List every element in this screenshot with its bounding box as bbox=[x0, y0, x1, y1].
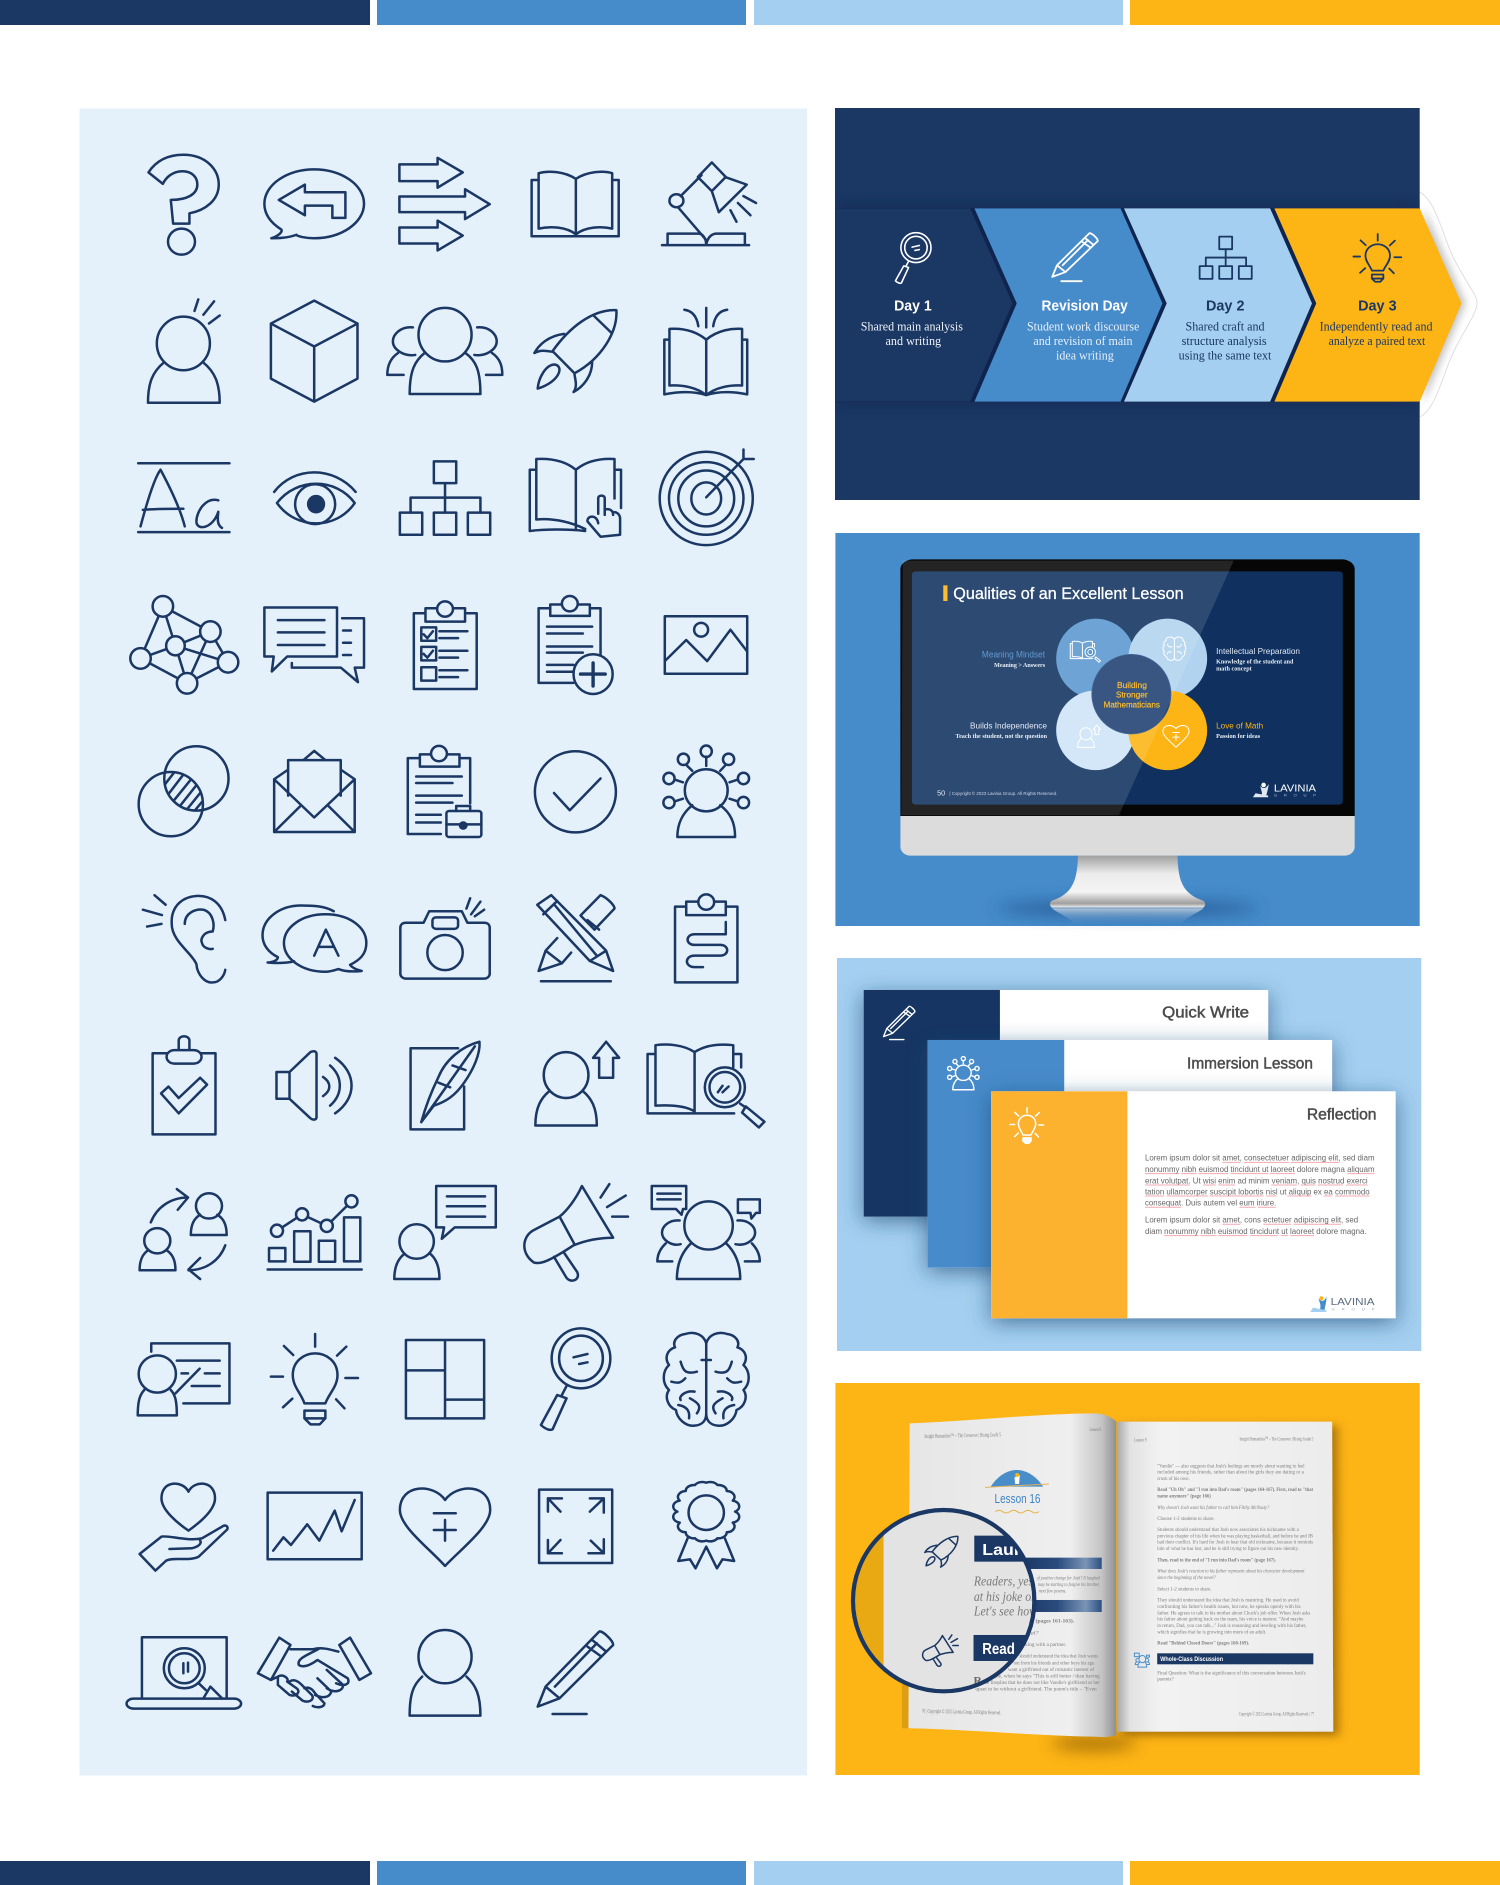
right workbook page: parents? bbox=[1157, 1677, 1174, 1682]
card: Reflection: Reflection bbox=[1307, 1106, 1376, 1123]
icon: megaphone in lens bbox=[923, 1635, 958, 1666]
card: Immersion Lesson: Immersion Lesson bbox=[1187, 1056, 1313, 1072]
left workbook page bbox=[908, 1413, 1116, 1737]
icon: person with idea rays bbox=[148, 299, 220, 403]
monitor stand bbox=[998, 856, 1258, 926]
left workbook page: want a girlfriend out of romantic interest of bbox=[1008, 1666, 1095, 1673]
icon: layout grid bbox=[406, 1340, 484, 1418]
Lavinia logo: LAVINIA bbox=[1274, 783, 1317, 794]
left workbook page: Insight Humanities™ – The Crossover | Rising Grade 5 bbox=[924, 1433, 1001, 1440]
icon: letters Aa bbox=[138, 463, 229, 532]
chevron: Day 3: analyze a paired text bbox=[1329, 335, 1425, 348]
Whole-Class Discussion bar: Whole-Class Discussion bbox=[1160, 1655, 1223, 1663]
lesson dome emblem bbox=[985, 1470, 1049, 1487]
slide labels: Meaning Mindset bbox=[982, 650, 1045, 660]
icon: group discussion bbox=[652, 1186, 760, 1279]
right workbook page: They should understand the idea that Josh is maturing. He used to avoid bbox=[1157, 1598, 1299, 1604]
bottom colour bars bbox=[0, 1861, 1500, 1885]
icon: camera bbox=[400, 898, 490, 979]
right workbook page: father. He agrees to talk to his mother about Chuck's job offer. When Josh asks bbox=[1157, 1610, 1311, 1616]
Read heading: Read bbox=[982, 1641, 1015, 1658]
ghost outline to the right of the panel bbox=[1420, 192, 1477, 417]
icon: growth chart bbox=[268, 1195, 362, 1269]
chevron: Day 1 bbox=[835, 208, 1012, 402]
slide title: Qualities of an Excellent Lesson bbox=[953, 584, 1184, 603]
monitor bezel bbox=[900, 559, 1355, 816]
card: Quick Write bbox=[864, 990, 1268, 1217]
right workbook page: Why doesn't Josh want his father to call him Filthy McNasty? bbox=[1157, 1504, 1269, 1511]
right workbook page: previous chapter of his life when he was playing basketball, and before he and JB bbox=[1157, 1533, 1313, 1539]
left workbook page: 76 | Copyright © 2023 Lavinia Group. All Rights Reserved. bbox=[922, 1708, 1001, 1716]
left workbook page: should understand the idea that Josh wants bbox=[1019, 1654, 1098, 1659]
left workbook page: the fireplies that he does not like Vandie's girlfriend or her bbox=[983, 1679, 1100, 1686]
right workbook page: Final Question: What is the significance of this conversation between Josh's bbox=[1157, 1670, 1306, 1676]
magnified italic copy: Let's see how bbox=[973, 1604, 1037, 1619]
section bars bbox=[1021, 1558, 1102, 1612]
Lavinia logo: LAVINIA bbox=[1331, 1297, 1375, 1308]
panel: icon library bbox=[80, 108, 807, 1776]
right workbook page: Read "Uh Oh" and "I run into Dad's room" (pages 164-167). First, read to "that bbox=[1157, 1486, 1313, 1493]
chevron: Day 3 bbox=[1274, 208, 1462, 402]
icon: clipboard with briefcase bbox=[408, 746, 481, 837]
icon: rocket in lens bbox=[925, 1536, 958, 1567]
left workbook page: upset to be without a girlfriend. The poem's title – "Even bbox=[975, 1686, 1097, 1692]
slide labels bbox=[956, 647, 1300, 740]
right workbook page: had their conflict. It's hard for Josh to hear that old nickname, because it reminds bbox=[1157, 1539, 1313, 1546]
slide footer: 50 bbox=[937, 789, 945, 797]
icon: magnifier on Day 1 bbox=[895, 233, 931, 283]
icon: brain bbox=[664, 1333, 749, 1426]
icon: bulb on yellow card bbox=[1010, 1108, 1044, 1143]
icon: book with pointing hand bbox=[530, 459, 621, 537]
screen glare bbox=[901, 561, 1234, 815]
chevron: Revision Day: idea writing bbox=[1056, 349, 1114, 363]
left workbook page: king with a partner. bbox=[1025, 1642, 1067, 1648]
right workbook page: Read "Behind Closed Doors" (pages 168-169). bbox=[1157, 1640, 1249, 1646]
icon: desk lamp over book bbox=[662, 162, 756, 245]
right workbook page: him of what he has lost, and he is still trying to figure out his new identity. bbox=[1157, 1545, 1299, 1552]
slide labels: Passion for ideas bbox=[1216, 733, 1261, 740]
chevron: Day 1: Day 1 bbox=[894, 298, 932, 314]
icons rows 5 to 8 bbox=[139, 746, 764, 1281]
left workbook page: Lesson 9 bbox=[1089, 1427, 1101, 1433]
lorem ipsum body copy: tation ullamcorper suscipit lobortis nisl ut aliquip ex ea commodo bbox=[1145, 1187, 1370, 1196]
panel: open workbook bbox=[835, 1383, 1420, 1775]
icon: group on right page bbox=[1134, 1653, 1149, 1667]
icon: person bbox=[410, 1630, 480, 1716]
icon: checklist clipboard bbox=[414, 601, 477, 689]
right workbook page: Students should understand that Josh now associates his nickname with a bbox=[1157, 1527, 1299, 1533]
card: Reflection bbox=[991, 1091, 1396, 1318]
Lavinia logo bbox=[1253, 783, 1317, 798]
left workbook page: next few poems. bbox=[1039, 1588, 1067, 1595]
chevron: Day 3: Day 3 bbox=[1358, 298, 1397, 314]
lorem ipsum body copy: consequat. Duis autem vel eum iriure. bbox=[1145, 1198, 1276, 1207]
left workbook page: may be starting to forgive his brother, bbox=[1038, 1581, 1100, 1588]
right workbook page: "Vandie" — also suggests that Josh's feelings are mostly about wanting to feel bbox=[1157, 1463, 1305, 1469]
icon: magnifying glass bbox=[541, 1328, 610, 1430]
icon: presenter at board bbox=[138, 1343, 229, 1415]
icon: eye bbox=[274, 472, 356, 524]
right workbook page: in return, Dad, you can talk..." Josh is reasoning and leveling with his father, bbox=[1157, 1622, 1307, 1629]
chevron: Day 2 bbox=[1124, 208, 1312, 402]
magnified italic copy bbox=[974, 1576, 1032, 1616]
left workbook page: ial? bbox=[1029, 1631, 1039, 1636]
icon: rocket bbox=[534, 310, 616, 392]
left workbook page: da" (pages 161-163). bbox=[1025, 1618, 1075, 1625]
icon: hierarchy on Day 2 bbox=[1200, 237, 1252, 279]
magnified italic copy: at his joke on bbox=[974, 1590, 1037, 1605]
icon: pencil bbox=[538, 1631, 613, 1714]
icon: award rosette bbox=[673, 1482, 739, 1568]
icon: hand holding heart bbox=[140, 1484, 228, 1571]
icon: pencil on Revision Day bbox=[1052, 233, 1098, 281]
icon: hierarchy chart bbox=[400, 461, 490, 535]
book shadows bbox=[902, 1680, 1136, 1752]
right workbook page: crush of his own. bbox=[1157, 1475, 1190, 1482]
right workbook page: Then, read to the end of "I run into Dad's room" (page 167). bbox=[1157, 1557, 1276, 1563]
lorem ipsum body copy: Lorem ipsum dolor sit amet, cons ectetuer adipiscing elit, sed bbox=[1145, 1215, 1358, 1224]
chevron: Day 3: Independently read and bbox=[1320, 320, 1433, 334]
icon: bulb on Day 3 bbox=[1353, 234, 1401, 282]
lesson 16 heading bbox=[995, 1492, 1040, 1513]
Read heading bbox=[974, 1634, 1026, 1661]
icon: clipboard with path bbox=[675, 894, 737, 982]
icon: person with arrow in pale circle bbox=[1078, 725, 1100, 747]
right workbook page: which signifies that he is growing into more of an adult. bbox=[1157, 1629, 1267, 1635]
icon: handshake bbox=[258, 1638, 371, 1707]
right workbook page: confronting his father's health issues, but now, he speaks openly with his bbox=[1157, 1603, 1301, 1610]
icon: question mark bbox=[148, 155, 219, 255]
icon: cube bbox=[271, 301, 357, 402]
lorem ipsum body copy: erat volutpat. Ut wisi enim ad minim veniam, quis nostrud exerci bbox=[1145, 1176, 1368, 1185]
icon: book and magnifier in blue circle bbox=[1070, 641, 1100, 662]
venn circles: Mathematicians bbox=[1104, 700, 1160, 709]
icon: heart in yellow circle bbox=[1163, 725, 1189, 747]
slide screen bbox=[912, 571, 1343, 805]
lorem ipsum body copy bbox=[1145, 1153, 1375, 1236]
icon: megaphone bbox=[524, 1184, 628, 1281]
chevron: Revision Day: and revision of main bbox=[1033, 335, 1133, 348]
chevron: Day 1: Shared main analysis bbox=[861, 320, 963, 334]
icon: light bulb bbox=[271, 1334, 358, 1424]
chevron: Revision Day: Revision Day bbox=[1042, 298, 1128, 314]
icon: crossed pencil and pen bbox=[537, 895, 615, 981]
Whole-Class Discussion bar bbox=[1157, 1653, 1313, 1664]
icon: open envelope bbox=[274, 751, 355, 832]
venn circles bbox=[1056, 619, 1207, 770]
left workbook page: mple, when he says "This is still better / than having bbox=[991, 1674, 1100, 1679]
icon: speaker bbox=[276, 1051, 352, 1120]
chevron: Revision Day: Student work discourse bbox=[1027, 320, 1139, 334]
icon: speech bubbles with letter bbox=[263, 906, 366, 972]
icon: check in circle bbox=[535, 751, 616, 832]
panel: lesson sequence chevrons bbox=[835, 108, 1477, 500]
icon: expand arrows bbox=[539, 1490, 612, 1563]
slide labels: Teach the student, not the question bbox=[956, 733, 1047, 740]
chevron: Day 1: and writing bbox=[886, 335, 941, 348]
right workbook page: Lesson 9 bbox=[1134, 1438, 1146, 1444]
monitor chin bbox=[900, 816, 1355, 856]
chevron: Day 2: Shared craft and bbox=[1186, 320, 1265, 334]
slide labels: Builds Independence bbox=[970, 721, 1047, 731]
icon: network bbox=[130, 596, 238, 694]
magnifying lens: R bbox=[974, 1676, 982, 1687]
icon: line graph bbox=[268, 1493, 362, 1559]
Launch heading bbox=[974, 1536, 1024, 1562]
lorem ipsum body copy: diam nonummy nibh euismod tincidunt ut laoreet dolore magna. bbox=[1145, 1227, 1367, 1236]
spell-check underlines bbox=[1145, 1162, 1375, 1236]
Lavinia logo: GROUP bbox=[1331, 1307, 1375, 1311]
lorem ipsum body copy: nonummy nibh euismod tincidunt ut laoreet dolore magna aliquam bbox=[1145, 1165, 1375, 1174]
right workbook page: Choose 1-2 students to share. bbox=[1157, 1516, 1215, 1522]
icon: clipboard with plus bbox=[539, 596, 613, 694]
slide labels: Meaning > Answers bbox=[994, 662, 1046, 669]
icon: person with ideas on blue card bbox=[948, 1057, 979, 1090]
icon: ear bbox=[143, 895, 225, 982]
icon: laptop with magnifier bbox=[127, 1637, 241, 1709]
right workbook page: his father about getting back on the team, his voice is mature: "And maybe bbox=[1157, 1616, 1304, 1623]
magnified italic copy: Readers, yes bbox=[973, 1575, 1033, 1589]
lesson 16 heading: Lesson 16 bbox=[995, 1492, 1040, 1506]
icon: book with magnifier bbox=[648, 1045, 764, 1127]
icon: speech bubble with return arrow bbox=[264, 169, 364, 238]
Lavinia logo: GROUP bbox=[1274, 793, 1316, 798]
right workbook page: since the beginning of the novel? bbox=[1157, 1574, 1216, 1581]
left workbook page: of positive change for Josh? It laughed bbox=[1037, 1575, 1100, 1581]
icon: person with up arrow bbox=[535, 1042, 619, 1126]
chevron: Day 2: using the same text bbox=[1179, 349, 1271, 363]
icons rows 9 to 11 bbox=[127, 1328, 749, 1716]
card: Quick Write: Quick Write bbox=[1162, 1005, 1249, 1021]
chevron: Day 2: Day 2 bbox=[1206, 298, 1244, 314]
icon: brain in light circle bbox=[1163, 637, 1186, 660]
slide footer bbox=[937, 789, 1057, 797]
venn circles: Building bbox=[1117, 681, 1147, 690]
icon: venn diagram bbox=[139, 746, 229, 836]
right workbook page: name anymore" (page 166) bbox=[1157, 1493, 1211, 1499]
chevron: Day 2: structure analysis bbox=[1182, 335, 1267, 348]
right workbook page: Insight Humanities™ – The Crossover | Rising Grade 5 bbox=[1239, 1437, 1313, 1443]
icon: person speaking bbox=[394, 1186, 496, 1279]
right workbook page bbox=[1117, 1422, 1333, 1732]
slide labels: Knowledge of the student and bbox=[1216, 659, 1294, 665]
lorem ipsum body copy: Lorem ipsum dolor sit amet, consectetuer adipiscing elit, sed diam bbox=[1145, 1153, 1375, 1163]
icon: group of people bbox=[387, 308, 502, 394]
panel: stacked lesson cards bbox=[837, 958, 1421, 1351]
top colour bars bbox=[0, 0, 1500, 25]
slide labels: math concept bbox=[1216, 666, 1253, 672]
icon: pencil on navy card bbox=[884, 1006, 915, 1040]
right workbook page: What does Josh's reaction to his father represent about his character development bbox=[1157, 1568, 1305, 1575]
venn circles: Stronger bbox=[1116, 690, 1148, 700]
panel: monitor slide bbox=[835, 533, 1420, 926]
slide footer: | Copyright © 2023 Lavinia Group. All Rights Reserved. bbox=[949, 790, 1057, 797]
icon: clipboard with check bbox=[153, 1036, 215, 1134]
right workbook page: Copyright © 2023 Lavinia Group. All Rights Reserved. | 77 bbox=[1239, 1711, 1314, 1717]
slide labels: Love of Math bbox=[1216, 721, 1263, 731]
right workbook page: Select 1-2 students to share. bbox=[1157, 1587, 1212, 1592]
icon: book with rays bbox=[664, 308, 747, 395]
right workbook page: included among his friends, rather than about the girls they are dating or a bbox=[1157, 1469, 1304, 1476]
icon: person with connected ideas bbox=[663, 746, 749, 837]
card: Immersion Lesson bbox=[928, 1040, 1332, 1268]
icon: feather on page bbox=[411, 1042, 480, 1129]
left workbook page: out from his friends and other boys his age. bbox=[1014, 1660, 1096, 1666]
Lavinia logo bbox=[1310, 1296, 1375, 1312]
slide labels: Intellectual Preparation bbox=[1216, 647, 1300, 656]
icon: picture bbox=[665, 616, 747, 674]
icon: heart with math signs bbox=[400, 1489, 490, 1566]
icons rows 1 to 4 bbox=[130, 155, 756, 694]
Launch heading: Launch bbox=[982, 1542, 1045, 1559]
icon: swapping people bbox=[140, 1189, 227, 1279]
icon: chat bubbles bbox=[264, 608, 364, 682]
magnifying lens bbox=[849, 1507, 1051, 1693]
icon: target with arrow bbox=[660, 449, 754, 545]
icon: open book bbox=[532, 172, 619, 236]
chevron: Revision Day bbox=[974, 208, 1162, 402]
icon: three arrows bbox=[399, 158, 490, 250]
